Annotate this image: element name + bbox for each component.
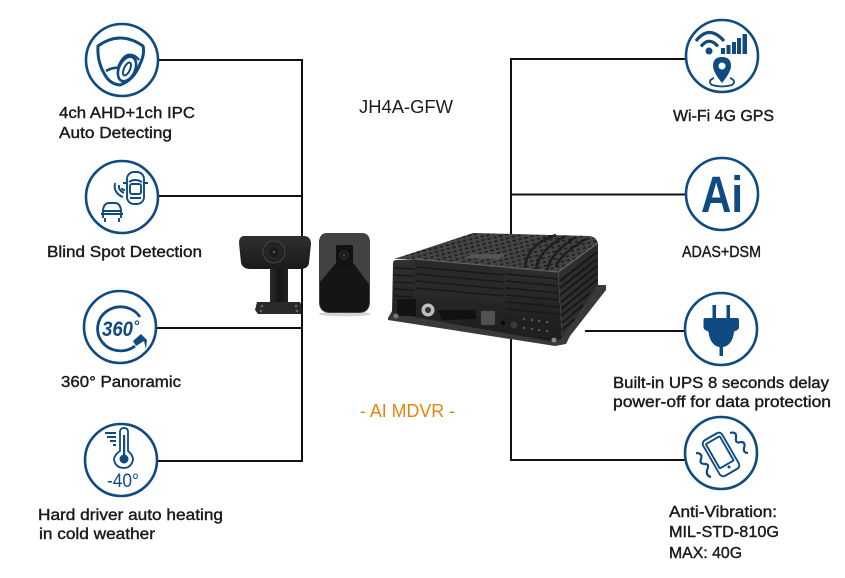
icon: two cars with sensor waves <box>86 161 158 233</box>
feature: blind spot detection <box>47 161 202 261</box>
front panel details <box>394 299 556 342</box>
label: MIL-STD: MIL-STD-810G <box>669 524 779 541</box>
label: max 40G: MAX: 40G <box>669 545 742 562</box>
feature: hard driver heating <box>38 424 223 543</box>
feature: 360 panoramic <box>61 291 181 391</box>
icon: 360 arrow: ° <box>134 318 140 335</box>
product: windshield camera on stand <box>239 236 311 315</box>
product: interior camera <box>319 233 371 316</box>
icon: wifi, signal and pin <box>686 20 758 92</box>
front face <box>392 259 562 342</box>
label: UPS delay: Built-in UPS 8 seconds delay <box>613 375 829 392</box>
right face <box>558 243 598 338</box>
label: 360 panoramic: 360° Panoramic <box>61 374 181 391</box>
subtitle: AI MDVR: - AI MDVR - <box>360 401 455 421</box>
icon: thermometer -40 <box>85 424 157 496</box>
feature: ADAS DSM <box>682 158 761 261</box>
label: hard driver heating: Hard driver auto heating <box>38 507 223 524</box>
feature: 4ch AHD + IPC <box>59 24 195 142</box>
product: MDVR unit <box>388 233 606 346</box>
mounting flange <box>388 285 606 346</box>
connector lines: left feature bus <box>156 59 302 462</box>
icon: thermometer -40: -40° <box>107 471 139 492</box>
feature: WiFi 4G GPS <box>673 20 774 125</box>
icon: 360 arrow: 360 <box>102 318 133 341</box>
label: auto detecting: Auto Detecting <box>59 125 172 142</box>
icon: plug <box>685 293 757 365</box>
label: anti-vibration: Anti-Vibration: <box>669 504 777 521</box>
label: ADAS+DSM: ADAS+DSM <box>682 244 761 261</box>
top face <box>394 233 598 272</box>
label: blind spot: Blind Spot Detection <box>47 244 202 261</box>
label: wifi 4g gps: Wi-Fi 4G GPS <box>673 108 774 125</box>
feature: anti-vibration <box>669 417 779 562</box>
title: model number: JH4A-GFW <box>359 97 453 117</box>
icon: dome camera <box>86 24 158 96</box>
feature: built-in UPS <box>613 293 831 411</box>
connector lines: right feature bus <box>511 59 686 460</box>
icon: Ai: Ai <box>701 166 743 223</box>
icon: 360 arrow <box>84 291 156 363</box>
label: data protection: power-off for data protection <box>613 394 831 411</box>
label: 4ch AHD: 4ch AHD+1ch IPC <box>59 105 195 122</box>
label: cold weather: in cold weather <box>39 526 155 543</box>
icon: shaking phone <box>685 417 757 489</box>
